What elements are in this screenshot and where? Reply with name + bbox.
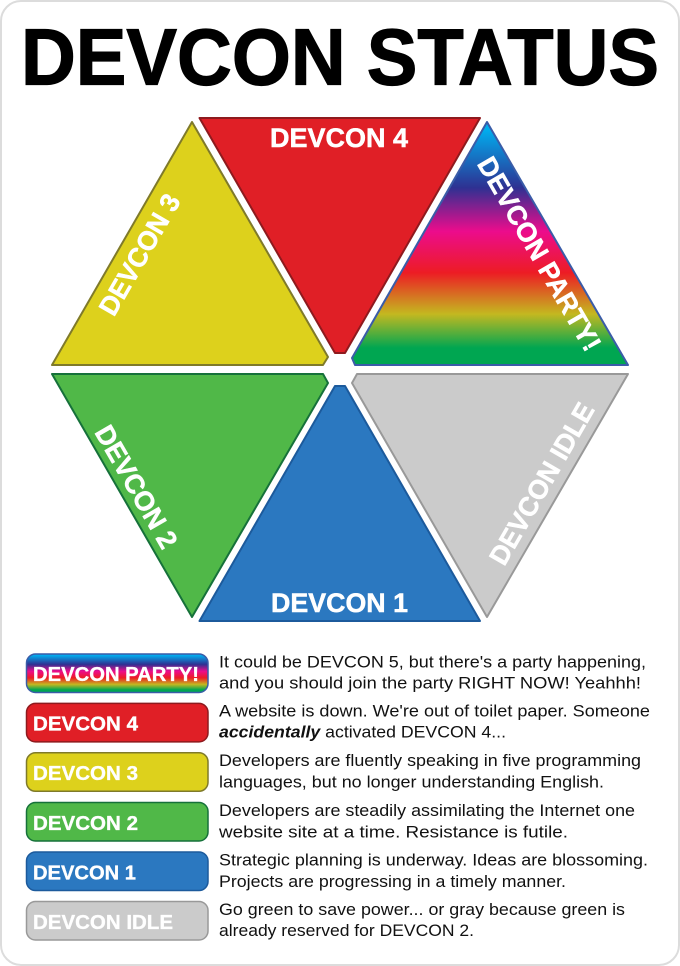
- legend row: DEVCON 2: Developers are steadily assimilating the Internet one: [219, 801, 635, 820]
- legend row: party: and you should join the party RIGHT NOW! Yeahhh!: [219, 674, 641, 692]
- legend row: DEVCON 2: website site at a time. Resistance is futile.: [218, 822, 568, 842]
- panel: DEVCON 4 triangle: DEVCON 4: [270, 123, 408, 153]
- panel: DEVCON 2 triangle: DEVCON 2: [89, 420, 183, 554]
- legend: [26, 652, 650, 940]
- panel: DEVCON PARTY triangle: [352, 122, 628, 365]
- panel: DEVCON 4 triangle: [200, 118, 480, 353]
- legend row: DEVCON IDLE: already reserved for DEVCON 2.: [219, 921, 474, 940]
- legend row: party: [26, 652, 646, 692]
- legend row: DEVCON IDLE: Go green to save power... or gray because green is: [219, 900, 625, 919]
- legend row: DEVCON 4: A website is down. We're out of toilet paper. Someone: [219, 701, 650, 720]
- panel: DEVCON 3 triangle: [52, 122, 328, 365]
- panel: DEVCON IDLE triangle: [352, 374, 628, 617]
- panel: DEVCON 2 triangle: [52, 374, 328, 617]
- legend row: party: DEVCON PARTY!: [33, 663, 199, 686]
- hexagon chart: [52, 118, 628, 621]
- legend row: DEVCON 4: accidentally activated DEVCON 4...: [219, 723, 506, 742]
- panel: DEVCON PARTY triangle: DEVCON PARTY!: [471, 152, 607, 356]
- legend row: DEVCON 3: Developers are fluently speaking in five programming: [219, 751, 641, 770]
- legend row: DEVCON 2: DEVCON 2: [33, 812, 138, 835]
- legend row: DEVCON 1: DEVCON 1: [33, 862, 136, 884]
- legend row: DEVCON 3: DEVCON 3: [33, 762, 138, 785]
- legend row: DEVCON 4: [26, 701, 650, 742]
- legend row: DEVCON 1: Projects are progressing in a timely manner.: [219, 872, 566, 891]
- panel: DEVCON 3 triangle: DEVCON 3: [93, 189, 187, 321]
- title: DEVCON STATUS: [21, 13, 659, 102]
- panel: DEVCON IDLE triangle: DEVCON IDLE: [484, 397, 600, 570]
- legend row: DEVCON IDLE: [26, 900, 625, 940]
- legend row: DEVCON IDLE: DEVCON IDLE: [33, 911, 173, 934]
- legend row: DEVCON 2: [26, 801, 635, 842]
- legend row: DEVCON 1: Strategic planning is underway. Ideas are blossoming.: [219, 850, 648, 870]
- legend row: DEVCON 1: [26, 850, 648, 891]
- legend row: DEVCON 3: [26, 751, 641, 792]
- panel: DEVCON 1 triangle: DEVCON 1: [271, 588, 408, 618]
- panel: DEVCON 1 triangle: [200, 386, 480, 621]
- legend row: party: It could be DEVCON 5, but there's a party happening,: [219, 652, 646, 671]
- legend row: DEVCON 4: DEVCON 4: [33, 713, 139, 736]
- legend row: DEVCON 3: languages, but no longer understanding English.: [219, 772, 604, 792]
